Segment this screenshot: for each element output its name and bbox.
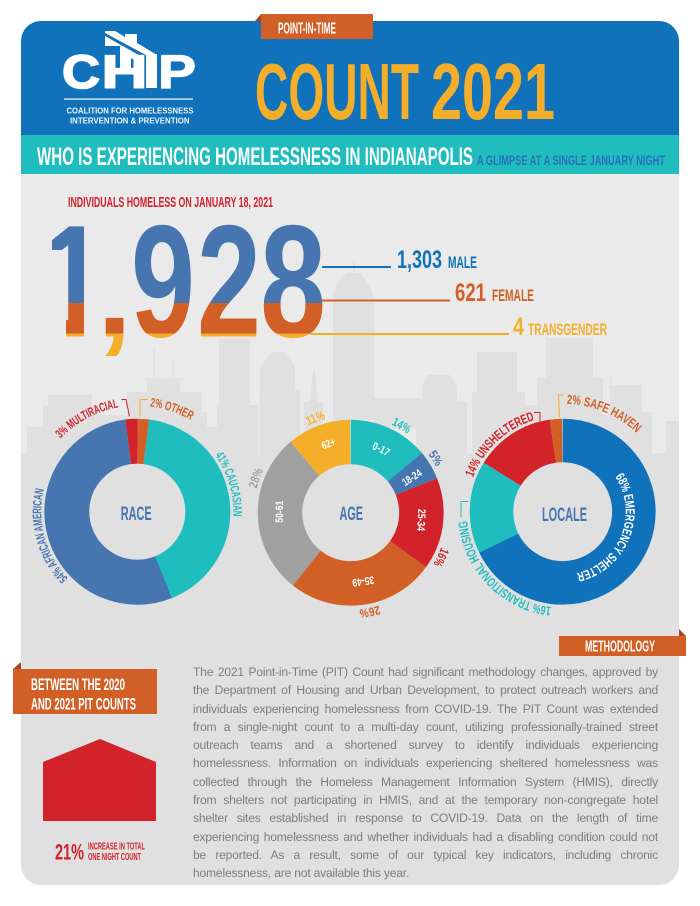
text block: methodology paragraph: The 2021 Point-in-Time (PIT) Count had significant methodology changes, approved by — [193, 665, 658, 679]
text block: methodology paragraph: homelessness, are not available this year. — [193, 866, 409, 880]
title: count 2021: 2021 — [431, 47, 555, 136]
text block: methodology paragraph: the Department of Housing and Urban Development, to protect outreach workers and — [193, 683, 658, 697]
gender breakdown: male: MALE — [448, 254, 477, 272]
race labels: 54% AFRICAN AMERICAN — [32, 488, 68, 584]
text block: methodology paragraph: outreach teams and a shortened survey to identify individuals experiencing — [193, 738, 658, 752]
locale center label: LOCALE — [542, 505, 587, 526]
logo: CHIP — [62, 31, 196, 126]
locale labels: 14% UNSHELTERED — [466, 412, 534, 477]
stat: 21% increase — [55, 840, 145, 864]
text block: methodology paragraph: individuals experiencing homelessness from COVID-19. The PIT Count was extended — [193, 702, 658, 716]
text block: methodology paragraph: be reported. As a result, some of our typical key indicators, including chronic — [193, 848, 658, 862]
age segment labels: 18-24 — [400, 467, 425, 489]
big number: 1,928: 1 — [38, 192, 110, 370]
locale labels — [458, 394, 642, 616]
logo: CHIP: INTERVENTION & PREVENTION — [70, 116, 190, 126]
race center label: RACE — [121, 504, 152, 525]
icon: red house — [43, 739, 156, 821]
gender breakdown: male: 1,303 — [397, 246, 442, 274]
big number: 1,928 — [52, 224, 322, 356]
text block: methodology paragraph: shelter sites established in response to COVID-19. Data on the length of time — [193, 811, 658, 825]
stat: 21% increase: INCREASE IN TOTAL — [88, 842, 145, 852]
age segment labels: 50-61 — [274, 501, 286, 523]
banner: between the 2020 and 2021: BETWEEN THE 2020 — [31, 676, 125, 694]
age segment labels — [274, 436, 427, 588]
donut chart: age — [280, 442, 421, 583]
locale labels: 16% TRANSITIONAL HOUSING — [458, 521, 551, 616]
text block: methodology paragraph: homelessness. Information on individuals experiencing sheltered homelessness was — [193, 756, 658, 770]
skyline silhouette — [21, 260, 679, 885]
locale labels: 2% SAFE HAVEN — [566, 394, 642, 432]
age segment labels: 0-17 — [372, 442, 391, 456]
age labels — [248, 411, 448, 618]
big number: 1,928: , — [97, 224, 132, 364]
heading: individuals homeless: INDIVIDUALS HOMELESS ON JANUARY 18, 2021 — [68, 194, 273, 211]
tab: point-in-time — [255, 14, 373, 39]
big number: 1,928: 2 — [197, 192, 261, 370]
age labels: 14% — [392, 418, 411, 434]
logo: CHIP: COALITION FOR HOMELESSNESS — [66, 106, 194, 116]
age labels: 11% — [306, 411, 325, 426]
text block: methodology paragraph — [193, 665, 658, 880]
race labels — [32, 398, 242, 584]
text block: methodology paragraph: experiencing homelessness and whether individuals had a disabling condition could not — [193, 830, 658, 844]
banner: between the 2020 and 2021: AND 2021 PIT COUNTS — [31, 696, 136, 714]
logo: CHIP: C — [62, 45, 100, 98]
gender breakdown: female: FEMALE — [492, 287, 534, 305]
age labels: 5% — [429, 450, 443, 466]
panel: blue header — [21, 21, 679, 135]
race labels: 41% CAUCASIAN — [216, 452, 242, 516]
race labels: 3% MULTIRACIAL — [55, 400, 118, 438]
text block: methodology paragraph: from shelters not participating in HMIS, and at the temporary non-congregate hotel — [193, 793, 658, 807]
big number: 1,928: 8 — [260, 192, 326, 370]
big number: 1,928: 9 — [131, 192, 195, 370]
stat: 21% increase: 21% — [55, 840, 84, 864]
gender breakdown: female: 621 — [455, 279, 486, 307]
age center label: AGE — [340, 504, 363, 525]
text block: methodology paragraph: collected through the Homeless Management Information System (HMIS), directly — [193, 775, 658, 789]
donut chart: locale — [492, 440, 634, 583]
race labels: 2% OTHER — [150, 398, 194, 420]
logo: CHIP: P — [158, 45, 196, 98]
locale labels: 68% EMERGENCY SHELTER — [576, 473, 635, 582]
donut chart: race — [67, 441, 208, 582]
age segment labels: 62+ — [320, 436, 337, 452]
logo: CHIP: H — [101, 45, 148, 98]
panel: teal subtitle band — [21, 135, 679, 174]
text block: methodology paragraph: from a single-night count to a multi-day count, utilizing professionally-trained street — [193, 720, 658, 734]
age labels: 28% — [248, 468, 263, 488]
gender breakdown: transgender — [310, 313, 607, 341]
title: count 2021: COUNT — [255, 47, 419, 136]
gender breakdown: transgender: TRANSGENDER — [528, 321, 607, 339]
age labels: 26% — [360, 606, 380, 618]
age segment labels: 25-34 — [414, 509, 427, 532]
tab: point-in-time: POINT-IN-TIME — [278, 20, 336, 38]
age labels: 16% — [434, 548, 448, 566]
age segment labels: 35-49 — [351, 573, 375, 588]
gender breakdown: male — [322, 246, 477, 274]
banner: methodology — [559, 629, 686, 656]
stat: 21% increase: ONE NIGHT COUNT — [88, 852, 141, 863]
gender breakdown: female — [322, 279, 534, 307]
gender breakdown: transgender: 4 — [513, 313, 524, 341]
banner: between the 2020 and 2021 — [13, 662, 157, 714]
